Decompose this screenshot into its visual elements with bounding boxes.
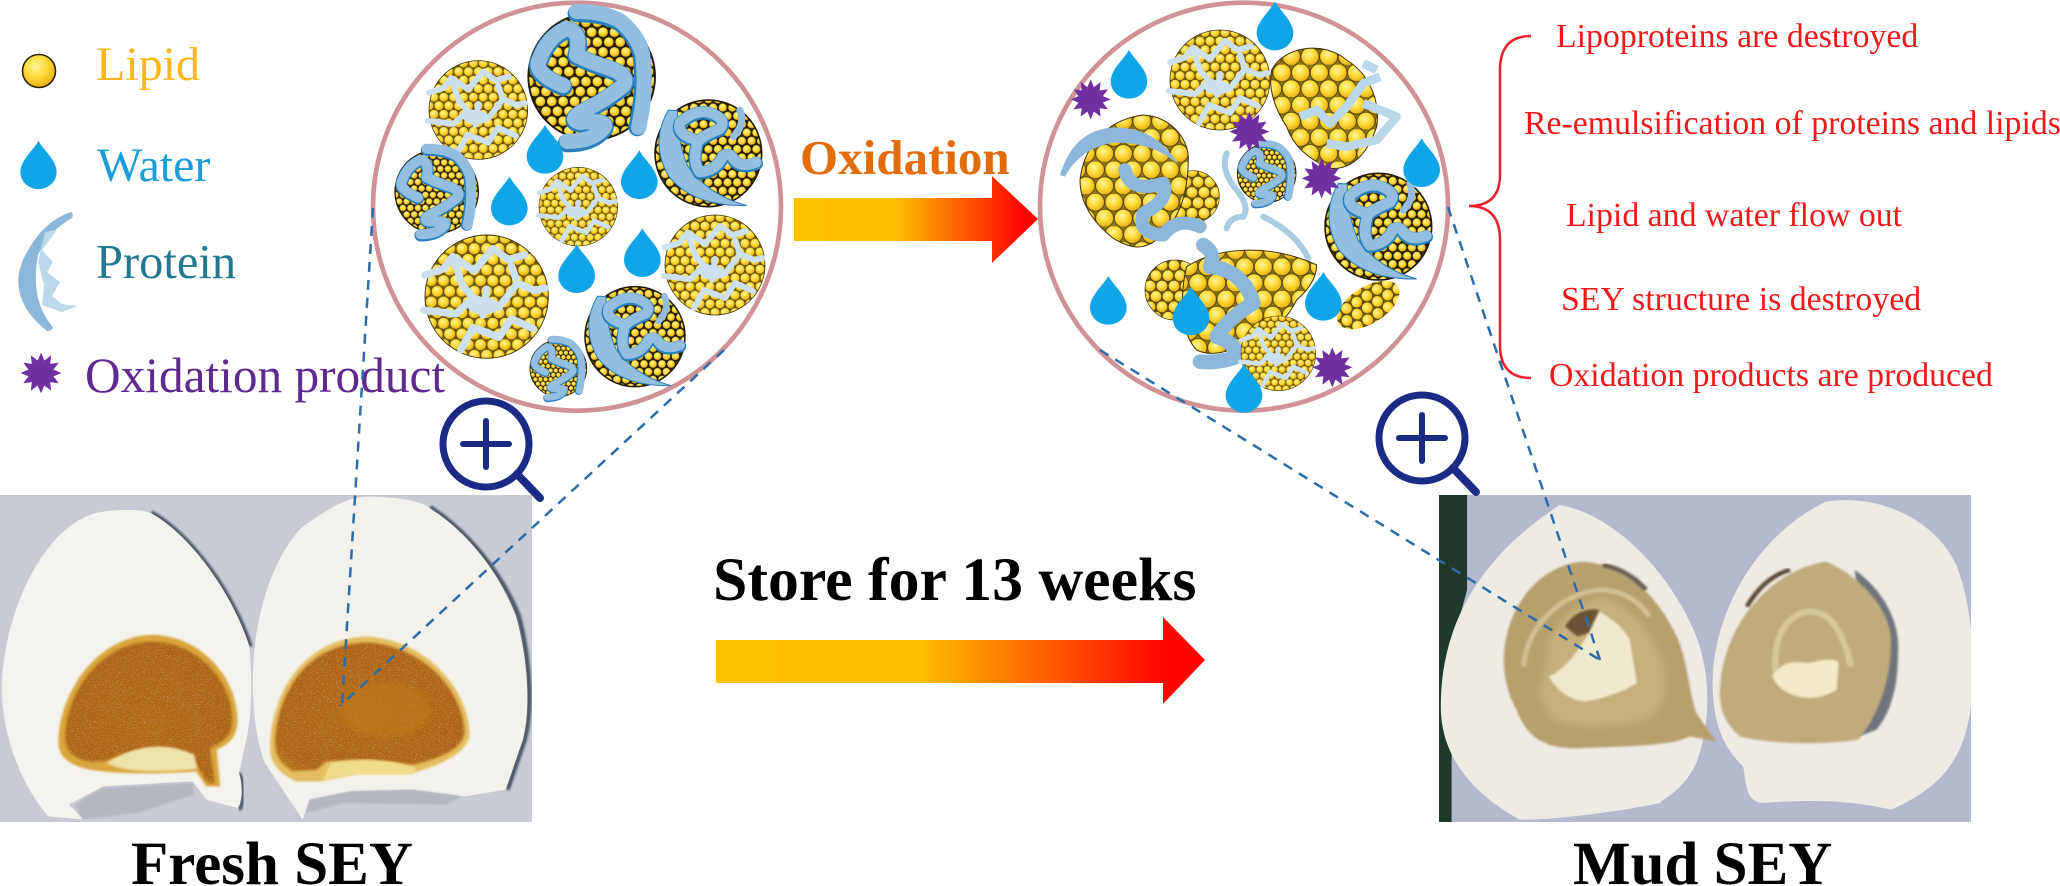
- particle: lower protein-wrapped lipid: [585, 287, 685, 387]
- protein strand centre: [1225, 153, 1308, 258]
- icon: oxidation product star: [21, 353, 61, 393]
- icon: lipid sphere: [22, 54, 56, 88]
- particle: small protein-wrapped lipid: [530, 339, 587, 398]
- lipid cluster with wisps top: [1169, 30, 1270, 130]
- left egg white: [1441, 505, 1707, 820]
- right yolk: [270, 637, 470, 781]
- small lipid group lower right: [1329, 271, 1408, 339]
- legend: [18, 38, 445, 403]
- legend label: Lipid: Lipid: [96, 38, 200, 91]
- magnifier icon right: [1379, 395, 1476, 492]
- outcome 5: Oxidation products are produced: [1549, 357, 1993, 394]
- particle: lower left lipoprotein: [424, 235, 548, 358]
- right protein-wrapped lipid: [1325, 173, 1432, 280]
- dashed zoom lines: fresh SEY: [340, 208, 724, 706]
- photo: mud SEY eggs: [1439, 495, 1973, 823]
- water drops: [491, 125, 661, 293]
- photo: fresh SEY eggs: [0, 495, 532, 822]
- particle: right lipoprotein: [664, 215, 765, 315]
- outcome 4: SEY structure is destroyed: [1561, 281, 1921, 318]
- particle: protein-wrapped lipid right: [655, 100, 762, 207]
- legend label: Water: Water: [97, 139, 210, 192]
- dark green background strip: [1439, 495, 1467, 823]
- particle: left protein-wrapped lipid: [395, 149, 478, 235]
- lipoprotein lower: [1240, 316, 1316, 391]
- dashed zoom lines: mud SEY: [1100, 207, 1600, 660]
- medium lipid cluster left: [1167, 171, 1219, 223]
- oxidation label: Oxidation: [800, 130, 1010, 185]
- small protein-wrapped lipid: [1237, 143, 1296, 204]
- icon: protein: [18, 212, 78, 331]
- left egg white: [2, 510, 251, 820]
- arrow: storage: [716, 617, 1205, 704]
- store arrow label: Store for 13 weeks: [713, 546, 1196, 614]
- particle: lipoprotein cluster: [428, 61, 528, 159]
- outcome 1: Lipoproteins are destroyed: [1556, 18, 1918, 55]
- brace: [1469, 36, 1531, 378]
- right egg white: [1713, 500, 1973, 810]
- arrow: oxidation: [794, 176, 1038, 263]
- magnifier icon left: [443, 401, 540, 498]
- left yolk: [1504, 562, 1716, 748]
- oxidation products: [1071, 79, 1352, 387]
- large lipid cluster top right: [1271, 48, 1397, 168]
- magnified circle: oxidized SEY structure: [1040, 2, 1448, 413]
- particle: protein-wrapped lipid: [528, 11, 655, 143]
- magnified circle: fresh SEY structure: [373, 3, 781, 411]
- outcome 3: Lipid and water flow out: [1566, 197, 1903, 234]
- large lipid cluster left with protein: [1060, 115, 1200, 247]
- right yolk: [1720, 562, 1898, 743]
- right egg white: [253, 497, 529, 820]
- outcomes list: [1524, 18, 2060, 394]
- left yolk: [58, 635, 237, 786]
- legend label: Oxidation product: Oxidation product: [85, 348, 445, 403]
- water drops: [1090, 2, 1440, 413]
- outcome 2: Re-emulsification of proteins and lipids: [1524, 105, 2060, 142]
- lipid cluster bottom: [1145, 245, 1317, 362]
- legend label: Protein: Protein: [96, 236, 236, 289]
- particle: central lipoprotein: [538, 167, 618, 246]
- icon: water drop: [20, 141, 57, 189]
